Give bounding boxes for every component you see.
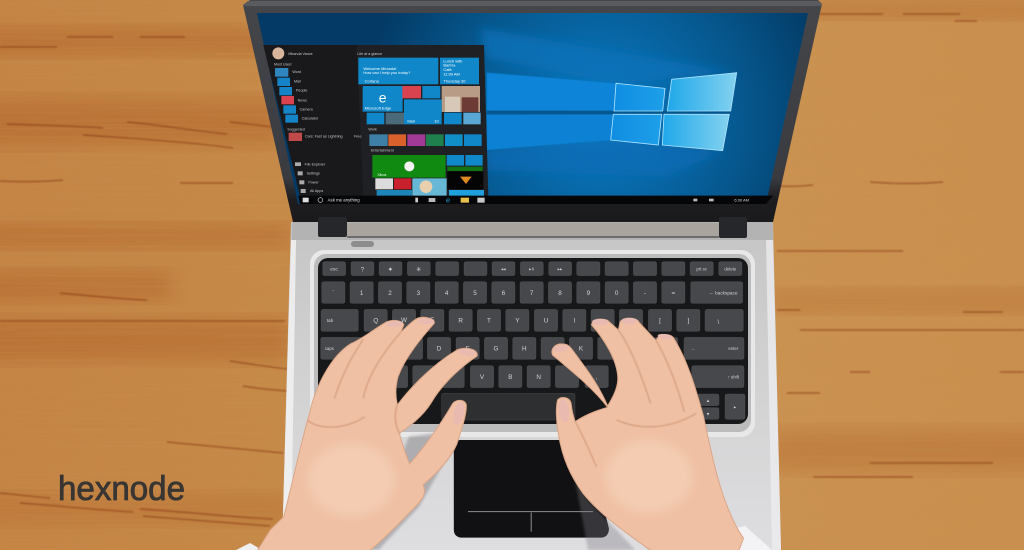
space bar and arrow keys: ▼	[706, 412, 710, 417]
number key row: 4	[445, 290, 449, 297]
number key row: ← backspace	[709, 290, 738, 295]
QWERTY key row: I	[573, 318, 575, 325]
most used app list	[274, 62, 319, 123]
function key row: ▸॥	[529, 267, 534, 272]
suggested app: Free	[354, 135, 362, 139]
right hand	[552, 318, 743, 550]
QWERTY key row: Q	[373, 318, 378, 325]
laptop screen wallpaper	[257, 13, 808, 204]
live tiles: Life at a glance	[357, 52, 382, 56]
QWERTY key row: [	[659, 318, 661, 325]
keyboard keys	[321, 262, 745, 420]
most used app list: Mail	[294, 79, 301, 83]
laptop base	[282, 217, 781, 550]
keyboard recess	[310, 250, 755, 437]
Windows taskbar: Ask me anything	[328, 198, 360, 203]
Windows taskbar: 6:30 AM	[734, 198, 749, 203]
bottom letter row: B	[508, 374, 512, 381]
user profile: Miranda Vance	[288, 52, 313, 56]
function key row: esc	[330, 267, 338, 273]
hinge with speaker bar	[292, 217, 773, 240]
bottom letter row: N	[536, 374, 541, 381]
home key row	[321, 337, 744, 359]
bottom letter row: V	[480, 374, 485, 381]
Start menu	[263, 45, 488, 196]
laptop lid and bezel	[243, 0, 822, 222]
function key row	[323, 262, 742, 276]
live tiles: Cortana	[365, 78, 380, 83]
shirt cuffs	[236, 526, 772, 550]
touchpad	[454, 440, 609, 538]
number key row: 8	[558, 290, 562, 297]
home key row: caps	[325, 346, 334, 351]
function key row: ✦	[388, 266, 393, 273]
bottom letter row: ,	[596, 374, 598, 381]
number key row: 5	[473, 290, 477, 297]
suggested app	[287, 127, 362, 141]
QWERTY key row: tab	[327, 318, 334, 323]
finger creases	[575, 330, 696, 467]
QWERTY key row: Y	[515, 318, 520, 325]
home key row: F	[466, 346, 470, 353]
space bar and arrow keys: ▲	[706, 398, 710, 403]
power button	[351, 241, 374, 247]
system shortcuts: Settings	[307, 171, 320, 175]
function key row: ◂◂	[501, 267, 506, 272]
number key row: 0	[615, 290, 619, 297]
most used app list: Camera	[300, 107, 314, 111]
fingernails	[552, 318, 673, 423]
live tiles: Mail	[407, 118, 415, 123]
live tiles: How can I help you today?	[363, 70, 411, 75]
number key row: `	[332, 290, 334, 297]
Windows taskbar	[298, 195, 773, 204]
live tiles: Welcome Miranda!	[363, 66, 396, 71]
live tiles: Microsoft Edge	[365, 106, 392, 111]
space bar and arrow keys	[442, 393, 745, 420]
hexnode logo: hexnode	[58, 470, 185, 508]
fingernails	[386, 318, 476, 426]
number key row: 2	[388, 290, 392, 297]
live tiles: Barbra	[443, 63, 456, 68]
function key row: prt sc	[696, 267, 708, 272]
QWERTY key row	[321, 309, 743, 331]
suggested app: Cars: Fast as Lightning	[305, 135, 343, 139]
live tiles: 10	[434, 118, 440, 123]
system shortcuts: Power	[308, 180, 319, 184]
most used app list: News	[298, 98, 307, 102]
live tiles: Café	[443, 67, 453, 72]
Windows taskbar: e	[446, 195, 450, 204]
system shortcuts: All Apps	[310, 189, 323, 193]
most used app list: Most Used	[274, 62, 291, 66]
number key row: 1	[360, 290, 364, 297]
bottom letter row	[385, 366, 744, 388]
bottom letter row: ↑ shift	[728, 375, 740, 380]
most used app list: Calculator	[302, 117, 319, 121]
most used app list: People	[296, 89, 307, 93]
live tiles: Thursday 30	[443, 78, 466, 83]
number key row: -	[644, 290, 646, 297]
live tiles: Work	[368, 128, 377, 132]
QWERTY key row: \	[717, 319, 719, 326]
suggested app: Suggested	[287, 127, 305, 131]
system shortcuts	[295, 162, 326, 193]
QWERTY key row: U	[544, 318, 549, 325]
number key row: 3	[417, 290, 421, 297]
space bar and arrow keys: ▸	[734, 404, 736, 409]
live tiles: Xbox	[377, 172, 386, 177]
bottom letter row: Z	[394, 374, 398, 381]
number key row: 7	[530, 290, 534, 297]
function key row: delete	[724, 267, 737, 272]
home key row: ←	[691, 346, 696, 352]
system shortcuts: File Explorer	[305, 162, 326, 166]
number key row: =	[671, 290, 675, 297]
home key row: enter	[728, 346, 739, 351]
QWERTY key row: W	[401, 317, 407, 324]
function key row: ✳	[416, 266, 421, 273]
function key row: ?	[361, 266, 365, 273]
live tiles: e	[379, 90, 387, 106]
live tiles: Lunch with	[443, 58, 462, 63]
QWERTY key row: T	[487, 318, 491, 325]
icon: Windows logo on wallpaper	[611, 73, 737, 151]
QWERTY key row: ]	[687, 318, 689, 325]
home key row: G	[494, 346, 499, 353]
QWERTY key row: R	[458, 318, 463, 325]
number key row	[322, 282, 743, 303]
live tiles: Entertainment	[371, 149, 394, 153]
home key row: D	[437, 346, 442, 353]
function key row: ▸▸	[558, 267, 563, 272]
left hand	[257, 317, 477, 550]
finger creases	[307, 333, 400, 433]
most used app list: Word	[292, 70, 301, 74]
live tiles	[357, 52, 484, 196]
QWERTY key row: E	[430, 317, 434, 324]
number key row: 9	[587, 290, 591, 297]
home key row: H	[522, 346, 527, 353]
user profile	[272, 47, 313, 59]
live tiles: 11:00 AM	[443, 71, 460, 76]
number key row: 6	[502, 290, 506, 297]
home key row: K	[579, 346, 584, 353]
